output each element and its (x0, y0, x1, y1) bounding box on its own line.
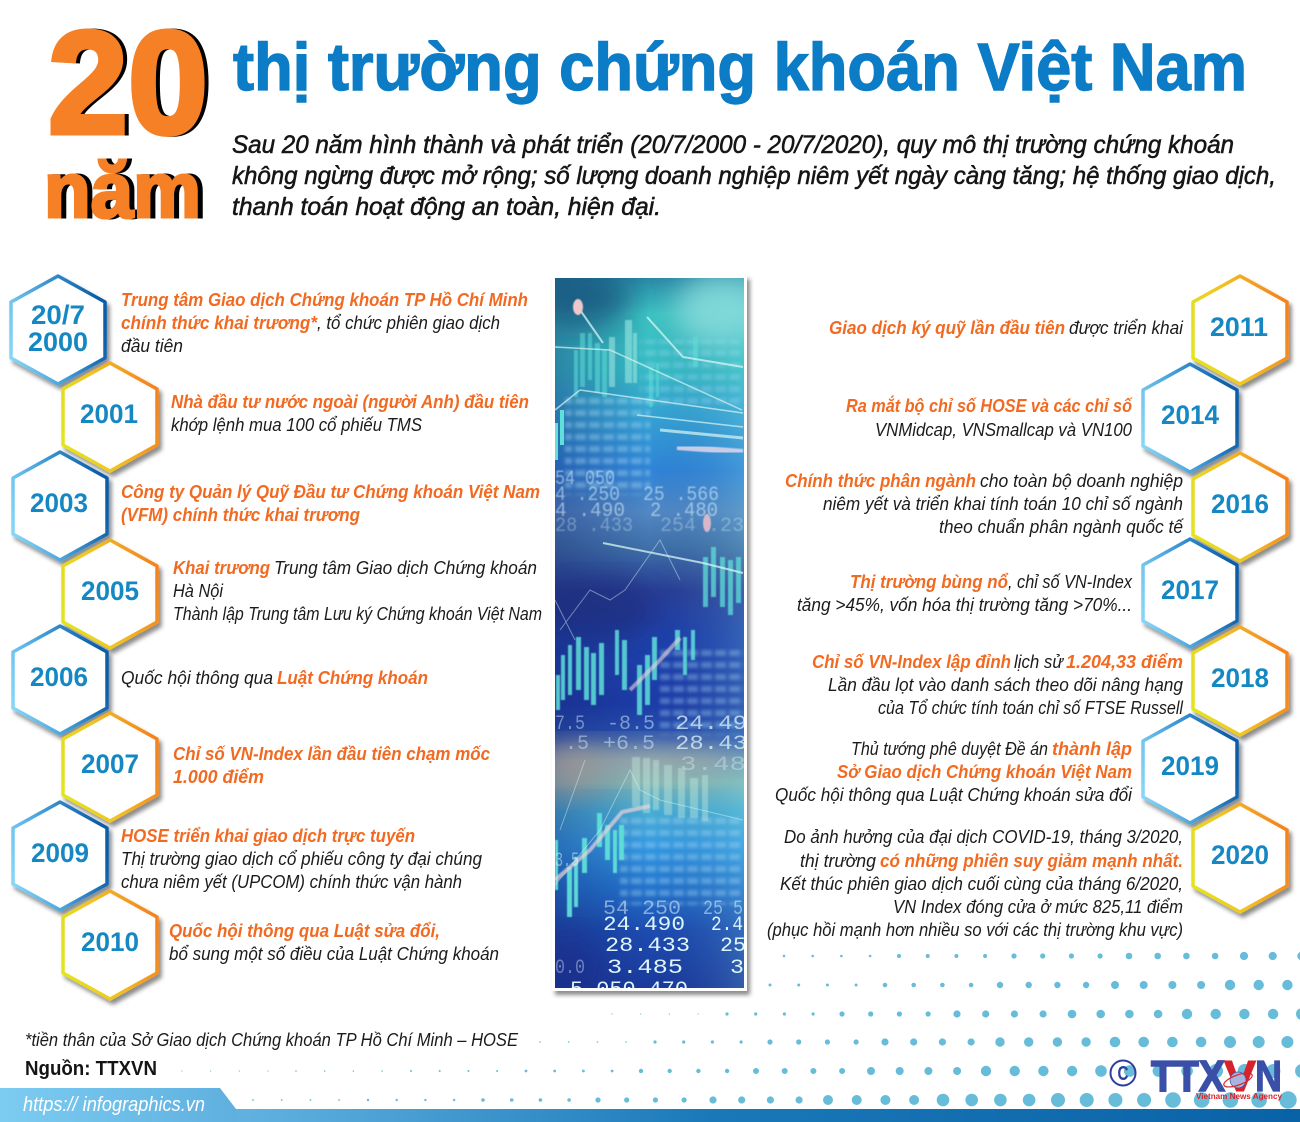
item 2018: Chỉ số VN-Index lập đỉnh (812, 652, 1011, 672)
item 2020: VN Index đóng cửa ở mức 825,11 điểm (893, 897, 1183, 917)
item 2003 (13, 452, 540, 560)
item 2016: niêm yết và triển khai tính toán 10 chỉ số ngành (823, 494, 1183, 514)
big number: 20 năm: năm (49, 146, 206, 234)
central photo: stock market chart collage: 24.490 (603, 914, 685, 937)
item 2005: Trung tâm Giao dịch Chứng khoán (274, 558, 537, 578)
item 2011: được triển khai (1069, 318, 1184, 338)
central photo: stock market chart collage: 3.48 (680, 754, 746, 777)
central photo: stock market chart collage: 3 (730, 957, 744, 980)
central photo: stock market chart collage: .5 (565, 733, 589, 756)
logo: TTXVN: N (1255, 1052, 1282, 1101)
item 2018: 1.204,33 điểm (1066, 652, 1183, 672)
item 2006: Quốc hội thông qua (121, 668, 273, 688)
item 2017: 2017 (1161, 575, 1219, 605)
item 2020: 2020 (1211, 840, 1269, 870)
logo: TTXVN: TTX (1151, 1052, 1225, 1101)
central photo: stock market chart collage: 4 .250 (555, 484, 620, 507)
item 2011: 2011 (1210, 312, 1268, 342)
source: Nguồn: TTXVN (25, 1058, 157, 1080)
intro paragraph: Sau 20 năm hình thành và phát triển (20/7/2000 - 20/7/2020), quy mô thị trường chứng khoán (232, 131, 1234, 159)
central photo: stock market chart collage: 2.4 (711, 914, 743, 937)
item 2007: 2007 (81, 749, 139, 779)
central photo: stock market chart collage: 24.49 (675, 713, 747, 736)
item 20/7/2000: Trung tâm Giao dịch Chứng khoán TP Hồ Chí Minh (121, 290, 528, 310)
item 2010: Quốc hội thông qua Luật sửa đổi, (169, 921, 440, 941)
logo: TTXVN: Vietnam News Agency (1196, 1092, 1283, 1101)
central photo: stock market chart collage: 3.5 (555, 850, 579, 873)
item 2009 (13, 802, 482, 910)
item 20/7/2000: , tổ chức phiên giao dịch (317, 313, 500, 333)
item 2017 (797, 539, 1237, 647)
item 2016 (785, 453, 1287, 561)
item 2001 (63, 363, 529, 471)
intro paragraph: không ngừng được mở rộng; số lượng doanh nghiệp niêm yết ngày càng tăng; hệ thống giao dịch, (232, 162, 1276, 190)
item 20/7/2000: chính thức khai trương* (121, 313, 318, 333)
item 2005: 2005 (81, 576, 139, 606)
big number: 20 năm (44, 1, 212, 234)
item 20/7/2000 (11, 276, 528, 384)
central photo: stock market chart collage: -8.5 (607, 713, 655, 736)
item 2001: Nhà đầu tư nước ngoài (người Anh) đầu tiên (171, 392, 529, 412)
central photo: stock market chart collage: 28.43 (675, 733, 747, 756)
item 2020 (767, 804, 1287, 940)
item 2009: HOSE triển khai giao dịch trực tuyến (121, 826, 415, 846)
item 2020: thị trường (800, 851, 876, 871)
central photo: stock market chart collage: 28.433 (605, 935, 690, 958)
central photo: stock market chart collage: 54 250 (603, 898, 681, 921)
item 2018: 2018 (1211, 663, 1269, 693)
item 2011: Giao dịch ký quỹ lần đầu tiên (829, 318, 1065, 338)
item 2005: Hà Nội (173, 581, 224, 601)
item 2014: 2014 (1161, 400, 1219, 430)
item 2003: (VFM) chính thức khai trương (121, 505, 360, 525)
item 2005: Thành lập Trung tâm Lưu ký Chứng khoán Việt Nam (173, 604, 542, 624)
item 2017: , chỉ số VN-Index (1008, 572, 1133, 592)
item 2007: Chỉ số VN-Index lần đầu tiên chạm mốc (173, 744, 490, 764)
item 2011 (829, 276, 1287, 384)
item 2010: 2010 (81, 927, 139, 957)
item 2018 (812, 627, 1287, 735)
item 2020: Kết thúc phiên giao dịch cuối cùng của tháng 6/2020, (780, 874, 1183, 894)
big number: 20 năm: năm (44, 146, 201, 234)
item 2005: Khai trương (173, 558, 270, 578)
item 20/7/2000: 20/7 (31, 300, 85, 330)
item 2009: 2009 (31, 838, 89, 868)
item 2001: khớp lệnh mua 100 cổ phiếu TMS (171, 415, 422, 435)
item 2010: bổ sung một số điều của Luật Chứng khoán (169, 944, 499, 964)
item 2019: Sở Giao dịch Chứng khoán Việt Nam (837, 762, 1132, 782)
website url: https:// infographics.vn (23, 1094, 205, 1116)
item 2018: Lần đầu lọt vào danh sách theo dõi nâng hạng (828, 675, 1183, 695)
central photo: stock market chart collage: 25 5 (703, 898, 743, 921)
central photo: stock market chart collage: 54 050 (555, 468, 615, 491)
item 2016: 2016 (1211, 489, 1269, 519)
item 2018: lịch sử (1014, 652, 1064, 672)
item 2010 (63, 891, 499, 999)
central photo: stock market chart collage (552, 276, 753, 998)
central photo: stock market chart collage: 3.485 (607, 957, 683, 980)
central photo: stock market chart collage: 25 .566 (643, 484, 719, 507)
item 2006 (13, 626, 428, 734)
central photo: stock market chart collage: +6.5 (603, 733, 655, 756)
title: thị trường chứng khoán Việt Nam (233, 30, 1247, 105)
logo: TTXVN (1151, 1052, 1283, 1101)
item 2016: theo chuẩn phân ngành quốc tế (939, 517, 1185, 537)
item 2003: 2003 (30, 488, 88, 518)
item 2017: Thị trường bùng nổ (850, 572, 1009, 592)
item 2005 (63, 540, 542, 648)
central photo: stock market chart collage: 25 (720, 935, 746, 958)
item 2020: Do ảnh hưởng của đại dịch COVID-19, tháng 3/2020, (784, 827, 1183, 847)
item 2014 (846, 364, 1237, 472)
footnote: *tiền thân của Sở Giao dịch Chứng khoán TP Hồ Chí Minh – HOSE (25, 1030, 519, 1050)
item 2006: Luật Chứng khoán (277, 668, 428, 688)
item 2006: 2006 (30, 662, 88, 692)
item 2003: Công ty Quản lý Quỹ Đầu tư Chứng khoán Việt Nam (121, 482, 540, 502)
central photo: stock market chart collage: 254 .23 (660, 515, 744, 538)
icon: copyright: C (1118, 1063, 1128, 1085)
item 2019: thành lập (1052, 739, 1132, 759)
right timeline (767, 276, 1287, 940)
halftone dot background (182, 956, 1300, 1100)
item 2014: VNMidcap, VNSmallcap và VN100 (875, 420, 1132, 440)
item 2016: Chính thức phân ngành (785, 471, 976, 491)
item 20/7/2000: đầu tiên (121, 336, 183, 356)
item 2020: có những phiên suy giảm mạnh nhất. (880, 851, 1183, 871)
left timeline (11, 276, 542, 999)
intro paragraph: thanh toán hoạt động an toàn, hiện đại. (232, 193, 661, 221)
big number: 20 năm: 20 (48, 1, 208, 164)
central photo: stock market chart collage: 28 .433 (555, 515, 633, 538)
item 2019: Thủ tướng phê duyệt Đề án (851, 739, 1048, 759)
logo: TTXVN: V (1224, 1052, 1257, 1101)
central photo: stock market chart collage: 2 .480 (650, 500, 718, 523)
item 2007: 1.000 điểm (173, 767, 264, 787)
item 2018: của Tổ chức tính toán chỉ số FTSE Russell (878, 698, 1184, 718)
item 2016: cho toàn bộ doanh nghiệp (980, 471, 1183, 491)
item 2009: Thị trường giao dịch cổ phiếu công ty đại chúng (121, 849, 482, 869)
bottom bar (0, 1088, 1300, 1122)
central photo: stock market chart collage: 4 .490 (555, 500, 625, 523)
central photo: stock market chart collage: 0.0 (555, 957, 585, 980)
item 2007 (63, 713, 490, 821)
item 2009: chưa niêm yết (UPCOM) chính thức vận hành (121, 872, 462, 892)
item 2019: Quốc hội thông qua Luật Chứng khoán sửa đổi (775, 785, 1133, 805)
item 20/7/2000: 2000 (28, 327, 88, 357)
central photo: stock market chart collage: 7.5 (555, 713, 585, 736)
item 2020: (phục hồi mạnh hơn nhiều so với các thị trường khu vực) (767, 920, 1183, 940)
item 2017: tăng >45%, vốn hóa thị trường tăng >70%... (797, 595, 1132, 615)
item 2014: Ra mắt bộ chỉ số HOSE và các chỉ số (846, 395, 1133, 416)
item 2019 (775, 715, 1237, 823)
intro paragraph (232, 131, 1276, 221)
item 2001: 2001 (80, 399, 138, 429)
icon: copyright (1110, 1060, 1136, 1086)
central photo: stock market chart collage: 5 050.470 (570, 979, 688, 1002)
item 2019: 2019 (1161, 751, 1219, 781)
big number: 20 năm: 20 (52, 1, 212, 164)
